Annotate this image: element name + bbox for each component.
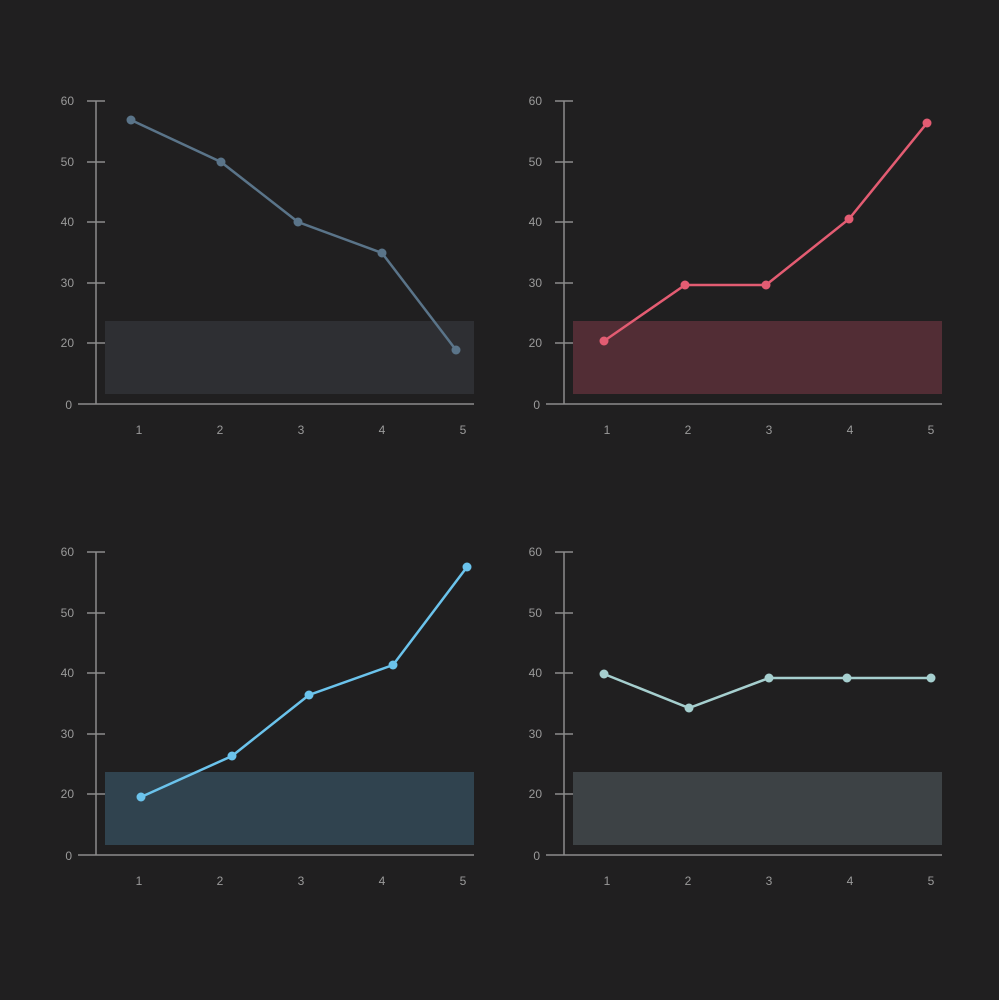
x labels — [136, 423, 467, 437]
x labels: 2 — [685, 874, 692, 888]
chart: top-right rising red line — [529, 94, 942, 437]
y labels: 50 — [61, 155, 74, 169]
band — [573, 772, 942, 845]
y labels — [529, 94, 542, 412]
x labels: 3 — [766, 874, 773, 888]
band — [573, 321, 942, 394]
x labels — [604, 423, 935, 437]
y labels: 50 — [529, 606, 542, 620]
y labels: 30 — [529, 276, 542, 290]
x labels: 1 — [136, 874, 143, 888]
y labels: 30 — [61, 727, 74, 741]
x labels: 5 — [460, 423, 467, 437]
chart: top-left declining line — [61, 94, 474, 437]
y labels: 20 — [61, 787, 74, 801]
x labels: 2 — [217, 423, 224, 437]
x labels: 1 — [136, 423, 143, 437]
x labels: 4 — [379, 874, 386, 888]
line — [136, 562, 472, 802]
x labels: 5 — [928, 874, 935, 888]
x labels: 4 — [847, 423, 854, 437]
x labels: 3 — [298, 874, 305, 888]
y labels: 50 — [529, 155, 542, 169]
y labels: 60 — [529, 545, 542, 559]
y labels — [61, 94, 74, 412]
x labels: 4 — [847, 874, 854, 888]
x labels: 2 — [685, 423, 692, 437]
y labels: 60 — [61, 94, 74, 108]
y labels: 50 — [61, 606, 74, 620]
y labels: 0 — [533, 849, 540, 863]
x labels: 2 — [217, 874, 224, 888]
line — [600, 670, 936, 712]
y labels: 20 — [61, 336, 74, 350]
x labels: 1 — [604, 874, 611, 888]
y labels: 0 — [65, 398, 72, 412]
y labels: 40 — [529, 215, 542, 229]
x labels: 5 — [928, 423, 935, 437]
y labels: 40 — [529, 666, 542, 680]
chart: bottom-right flat teal line — [529, 545, 942, 888]
y labels: 0 — [533, 398, 540, 412]
y labels — [529, 545, 542, 863]
x labels — [604, 874, 935, 888]
x labels: 3 — [298, 423, 305, 437]
y labels: 20 — [529, 787, 542, 801]
x labels: 5 — [460, 874, 467, 888]
y labels: 30 — [61, 276, 74, 290]
band — [105, 772, 474, 845]
y labels: 20 — [529, 336, 542, 350]
y labels: 60 — [61, 545, 74, 559]
band — [105, 321, 474, 394]
y labels — [61, 545, 74, 863]
y labels: 0 — [65, 849, 72, 863]
x labels — [136, 874, 467, 888]
x labels: 3 — [766, 423, 773, 437]
line — [600, 118, 932, 346]
y labels: 30 — [529, 727, 542, 741]
line — [126, 116, 460, 354]
chart: bottom-left rising blue line — [61, 545, 474, 888]
y labels: 60 — [529, 94, 542, 108]
y labels: 40 — [61, 666, 74, 680]
y labels: 40 — [61, 215, 74, 229]
x labels: 1 — [604, 423, 611, 437]
x labels: 4 — [379, 423, 386, 437]
